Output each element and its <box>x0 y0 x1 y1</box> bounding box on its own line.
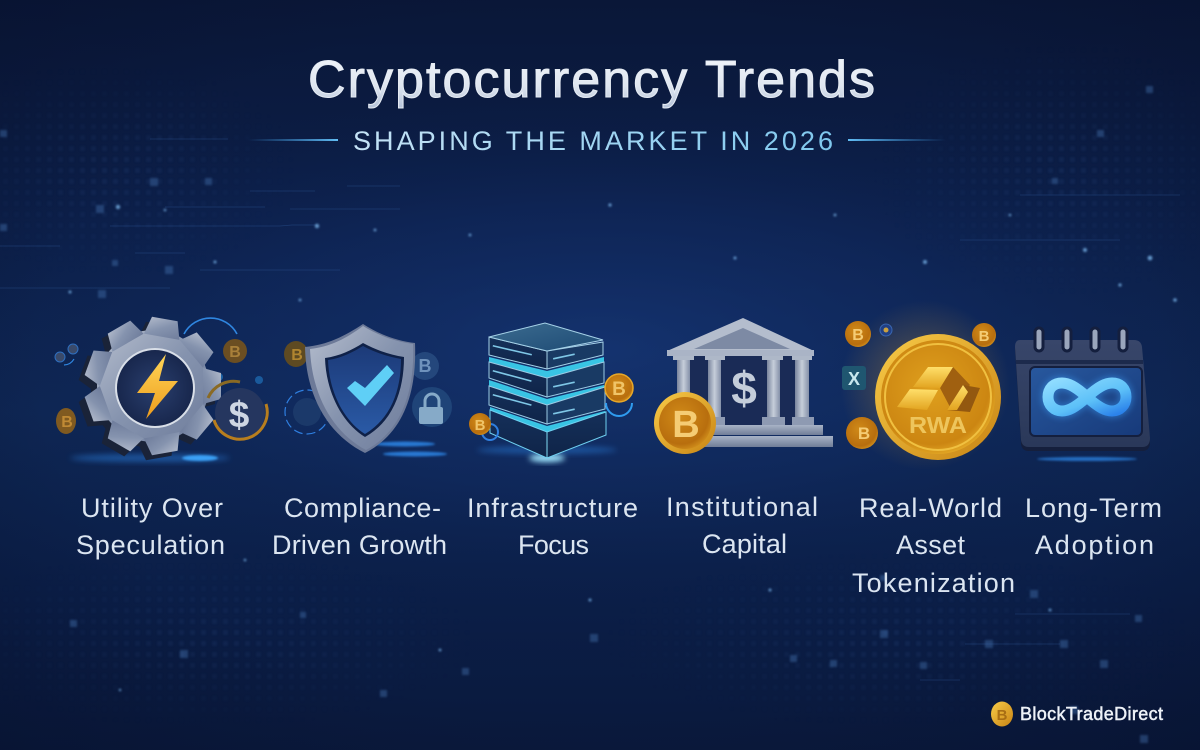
label: Infrastructure Focus <box>467 493 638 560</box>
small bitcoin coins: B <box>979 328 990 345</box>
bitcoin coin, left of stack: B <box>475 417 486 434</box>
server unit 2 <box>489 357 604 397</box>
icon: calendar with infinity symbol <box>1015 328 1150 461</box>
small bitcoin coins: B <box>852 327 864 344</box>
bitcoin coin, faded, left: B <box>61 414 73 431</box>
bitcoin coin: B <box>672 404 700 446</box>
base block <box>490 407 606 458</box>
label: Long-Term Adoption <box>1025 493 1162 560</box>
small bitcoin coins <box>845 321 996 449</box>
label: Infrastructure Focus: Focus <box>518 530 589 560</box>
subtitle with side rules: SHAPING THE MARKET IN 2026 <box>353 126 833 156</box>
X token badge: X <box>848 369 860 389</box>
X token badge <box>842 366 866 390</box>
label: Utility Over Speculation: Utility Over <box>81 493 223 523</box>
label: Utility Over Speculation: Speculation <box>76 530 225 560</box>
icon: bank building with bitcoin: $ <box>731 362 757 414</box>
small bitcoin coins: B <box>858 424 870 443</box>
dollar coin <box>208 381 267 439</box>
label: Institutional Capital: Capital <box>702 529 787 559</box>
icon: RWA gold coin: RWA <box>909 412 967 438</box>
icon: server stack <box>469 323 633 462</box>
label: Compliance-Driven Growth: Driven Growth <box>272 530 447 560</box>
columns <box>673 356 814 425</box>
icon: gear with lightning bolt <box>55 316 267 462</box>
label: Institutional Capital: Institutional <box>666 492 818 522</box>
label: Real-World Asset Tokenization: Asset <box>896 530 965 560</box>
label: Long-Term Adoption: Long-Term <box>1025 493 1162 523</box>
label: Institutional Capital <box>666 492 818 559</box>
icon: shield with check mark <box>284 324 452 456</box>
logo: BlockTradeDirect <box>991 702 1163 726</box>
faded bitcoin coin <box>284 341 308 367</box>
gold bars <box>897 367 980 412</box>
label: Long-Term Adoption: Adoption <box>1035 530 1154 560</box>
bitcoin coin, left of stack <box>469 413 498 440</box>
label: Infrastructure Focus: Infrastructure <box>467 493 638 523</box>
bitcoin coin, faded, upper right: B <box>229 344 241 361</box>
binder rings <box>1035 328 1127 351</box>
server unit 3 <box>489 380 605 424</box>
label: Real-World Asset Tokenization: Real-World <box>859 493 1002 523</box>
logo: BlockTradeDirect: B <box>997 707 1008 724</box>
title: Cryptocurrency Trends <box>308 51 875 109</box>
label: Real-World Asset Tokenization <box>852 493 1015 598</box>
label: Utility Over Speculation <box>76 493 225 560</box>
server unit 1 <box>489 323 603 369</box>
bitcoin coin, faded, upper right <box>223 339 247 363</box>
icon: bank building with bitcoin <box>654 318 833 454</box>
bitcoin coin, right of stack <box>605 374 633 416</box>
dollar coin: $ <box>229 394 250 435</box>
icon: RWA gold coin <box>840 300 1010 470</box>
logo: BlockTradeDirect: BlockTradeDirect <box>1020 704 1163 724</box>
label: Real-World Asset Tokenization: Tokenization <box>852 568 1015 598</box>
steps <box>700 425 833 447</box>
padlock badge <box>412 387 452 427</box>
bitcoin coin, right of stack: B <box>612 379 626 400</box>
faded bitcoin coin: B <box>291 347 303 364</box>
faded blue bitcoin coin <box>411 352 439 380</box>
bitcoin coin, faded, left <box>56 408 76 434</box>
label: Compliance-Driven Growth: Compliance- <box>284 493 441 523</box>
label: Compliance-Driven Growth <box>272 493 447 560</box>
faded blue bitcoin coin: B <box>418 356 432 376</box>
bitcoin coin <box>654 392 716 454</box>
